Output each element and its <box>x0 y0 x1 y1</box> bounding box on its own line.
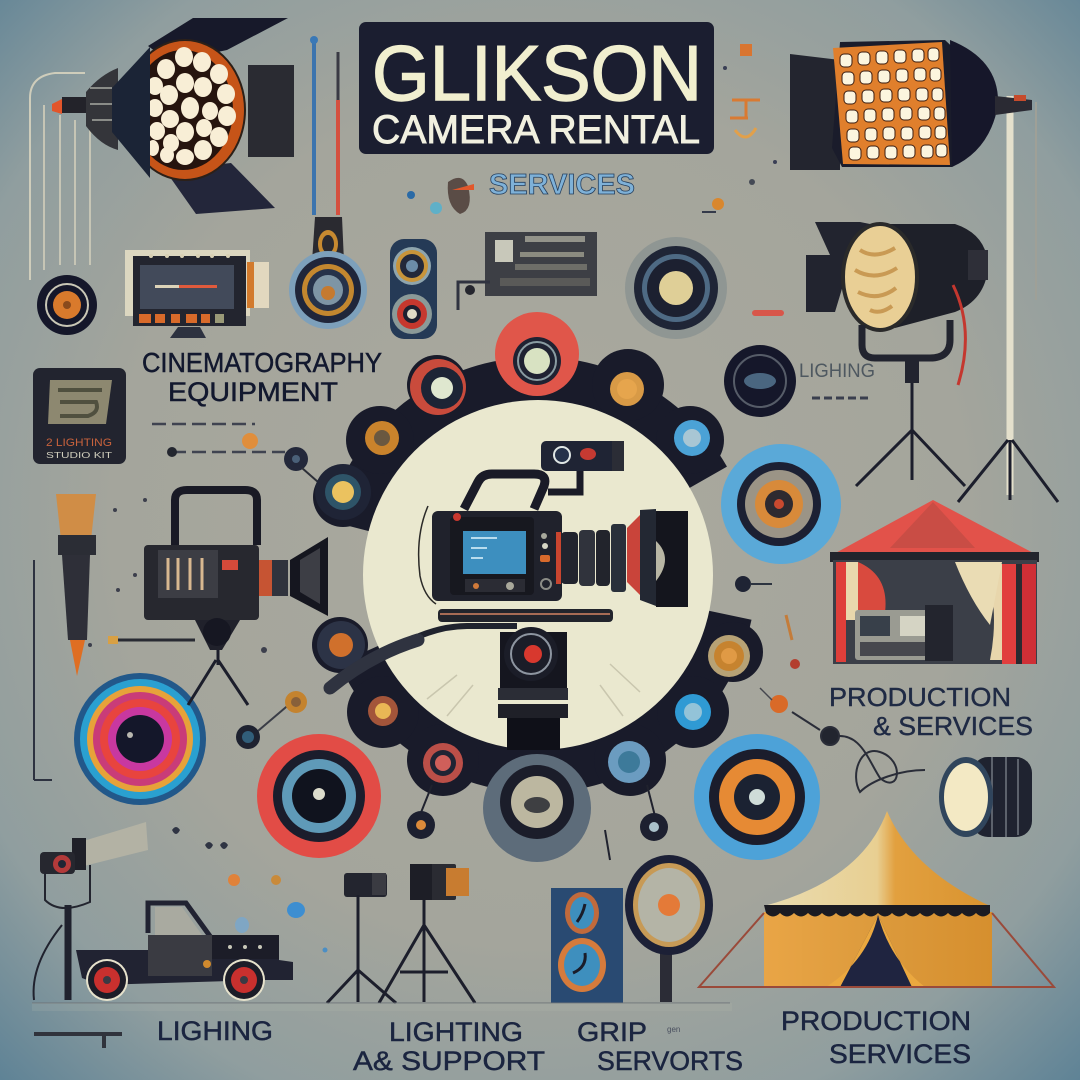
small nodes right <box>735 576 800 713</box>
speaker: two lens panel <box>390 239 437 339</box>
title panel <box>359 22 714 154</box>
cinematography heading: CINEMATOGRAPHY <box>142 347 382 378</box>
tent: red striped <box>830 500 1039 664</box>
lens: rainbow left <box>74 673 206 805</box>
central camera on tripod head <box>330 441 688 750</box>
label: lighting and support: A& SUPPORT <box>353 1046 545 1076</box>
wheel lenses <box>315 312 750 862</box>
label: grip servorts <box>577 1017 743 1076</box>
label: grip servorts: SERVORTS <box>597 1046 743 1076</box>
camera: cine camera on tripod <box>108 490 328 705</box>
card: logo: STUDIO KIT <box>46 451 112 460</box>
label: grip servorts: gen <box>667 1025 680 1034</box>
speaker: two cones <box>551 888 623 1003</box>
microphone stick <box>34 494 96 780</box>
card: logo: 2 LIGHTING <box>46 437 112 449</box>
cinematography heading: EQUIPMENT <box>168 377 338 407</box>
flecks on right <box>702 212 784 316</box>
central wheel: dark ring <box>312 312 763 862</box>
lens: far-left small <box>37 275 97 335</box>
lens: red left lower <box>257 734 381 858</box>
ground band <box>32 1003 732 1048</box>
light: top-right softbox <box>790 40 1036 495</box>
decorative paint flecks near services <box>407 44 777 214</box>
label: lighting and support: LIGHTING <box>389 1017 523 1047</box>
lighting label with lens icon: LIGHING <box>799 361 875 382</box>
lighting label with lens icon <box>724 345 875 417</box>
light: top-left barn door spotlight <box>30 18 294 280</box>
production services heading: & SERVICES <box>873 711 1033 741</box>
label: production services: PRODUCTION <box>781 1006 971 1036</box>
cinematography heading <box>142 347 382 407</box>
lens: top center right <box>625 237 727 339</box>
truck <box>76 903 293 1001</box>
label: grip servorts: GRIP <box>577 1017 647 1047</box>
label: production services <box>781 1006 971 1069</box>
lens: blue right upper <box>721 444 841 564</box>
production services heading: PRODUCTION <box>829 682 1011 712</box>
card: logo <box>33 368 126 464</box>
lens: spot right <box>939 757 1032 837</box>
label: production services: SERVICES <box>829 1039 971 1069</box>
services heading: SERVICES <box>489 169 635 201</box>
camera body <box>419 441 688 607</box>
grip equipment sketch <box>458 232 597 310</box>
flecks left <box>88 498 267 653</box>
cable loop <box>792 712 925 792</box>
stand with disc lens <box>625 855 713 1002</box>
central cream disc <box>363 400 713 750</box>
connector with small node <box>152 424 318 482</box>
small connector nodes <box>236 691 307 749</box>
label: lighing: LIGHING <box>157 1016 273 1046</box>
camera on small tripod: boom light <box>34 822 148 1000</box>
label: lighting and support <box>353 1017 545 1076</box>
light stand with blue and red poles <box>289 36 367 329</box>
production services heading <box>829 682 1033 741</box>
title: camera rental: CAMERA RENTAL <box>372 108 700 152</box>
tent: orange <box>699 811 1054 987</box>
title: GLIKSON: GLIKSON <box>372 29 702 117</box>
flecks bottom <box>172 827 328 952</box>
light: fresnel on tripod <box>806 222 1058 502</box>
light tripods <box>327 864 475 1003</box>
monitor <box>125 250 269 338</box>
lens: blue right lower <box>694 734 820 860</box>
